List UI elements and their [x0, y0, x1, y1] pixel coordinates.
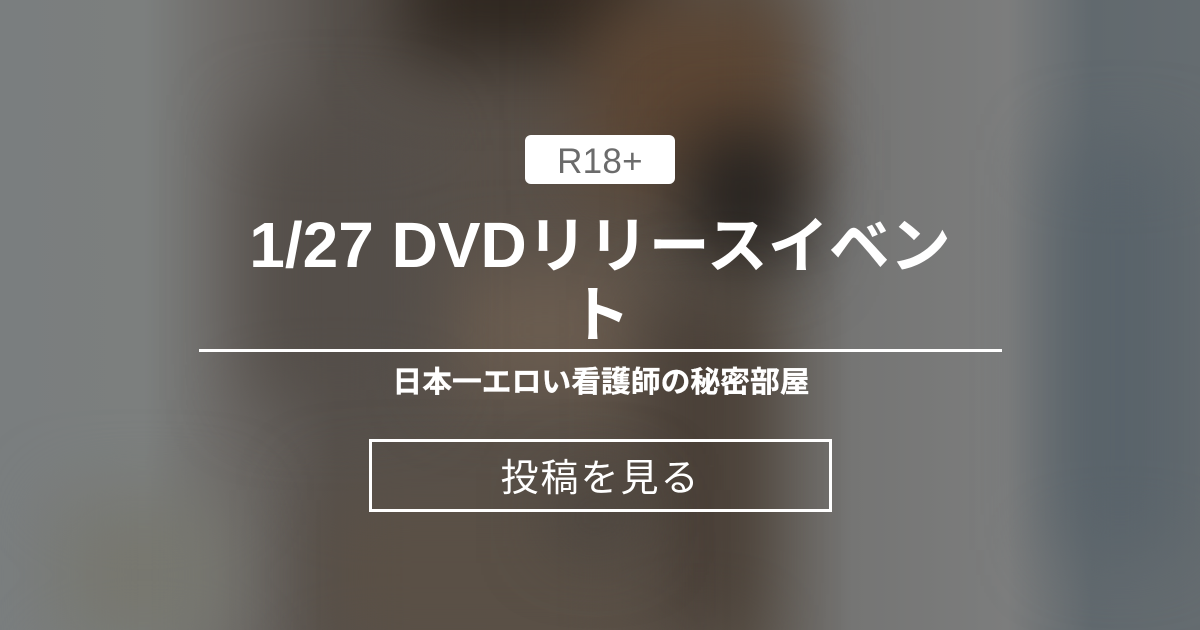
button: view post — [369, 439, 832, 512]
title — [249, 196, 951, 354]
subtitle: creator name: 日本一エロい看護師の秘密部屋 — [392, 357, 810, 401]
title: ト — [569, 265, 630, 354]
divider line — [199, 349, 1002, 352]
title: 1/27 DVDリリースイベン — [249, 196, 951, 285]
badge: R18+: R18+ — [557, 142, 643, 181]
button: view post: 投稿を見る — [500, 447, 700, 502]
badge: R18+ — [525, 135, 675, 184]
